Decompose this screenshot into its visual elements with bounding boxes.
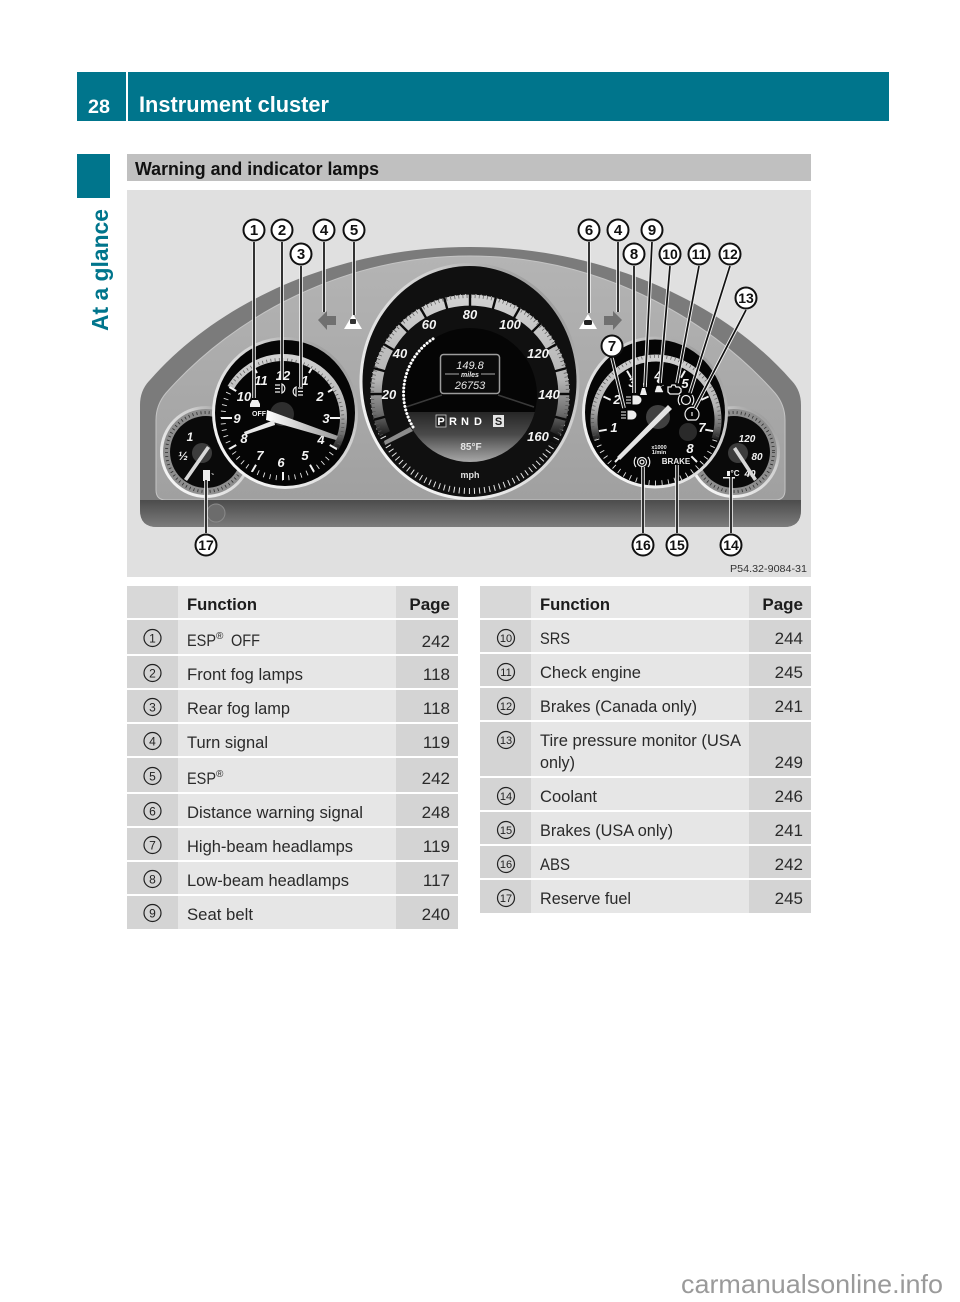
callout lines [206,242,746,533]
callouts: numbered markers [196,220,756,556]
row 9 [127,896,458,929]
row 12: 241 [775,697,803,716]
row 4: 119 [423,733,450,752]
clock numerals: 4 [316,432,325,447]
table header: Page [762,595,803,614]
row 11 [480,654,811,686]
row 6 [127,794,458,826]
row 2 [127,656,458,688]
row 4 [127,724,458,756]
page number tab [77,72,126,121]
tach numerals: 7 [698,420,706,435]
page number tab: 28 [88,97,110,118]
temperature gauge: 40 [743,469,756,480]
row 7: 7 [149,838,156,852]
turn signal right arrow [604,311,622,330]
row 5 [127,758,458,792]
icon: check engine [668,385,681,394]
speed needle [384,427,413,445]
clock numerals: 9 [233,411,241,426]
callouts: numbered markers: 4 [320,222,329,239]
row 1 [127,620,458,654]
dotted fuel-economy arc [404,337,436,427]
row 5: 5 [149,770,156,784]
clock numerals: 6 [277,455,285,470]
icon: airbag [655,379,664,392]
label: BRAKE: BRAKE [662,457,691,466]
chapter title bar: Instrument cluster [139,92,329,117]
gear indicator [436,415,504,428]
section heading: Warning and indicator lamps [135,159,379,179]
row 12: Brakes (Canada only) [540,697,697,716]
icon: coolant [723,471,735,478]
table header: Function [187,595,257,614]
table header: Function [540,595,610,614]
row 8: 8 [149,872,156,886]
tach numerals: 1 [610,420,618,435]
callouts: numbered markers: 9 [648,222,656,239]
row 7 [127,828,458,860]
row 4: Turn signal [187,733,268,752]
tach unit label: 1/min [652,450,667,456]
row 6: 6 [149,804,156,818]
row 8: 117 [423,871,450,890]
row 1: OFF [231,631,260,650]
temperature gauge: 80 [751,452,763,463]
speed numerals: 160 [527,429,550,444]
row 1: 242 [422,632,450,651]
row 17 [480,880,811,913]
row 3: Rear fog lamp [187,699,290,718]
speed numerals: 20 [381,387,397,402]
callouts: numbered markers: 2 [278,222,286,239]
tach unit label [651,445,667,456]
icon: low beam [626,396,641,404]
outside temperature: 85°F [460,442,482,453]
gear indicator: N [461,416,469,428]
icon: high beam [621,411,636,419]
row 16 [480,846,811,878]
tach numerals: 4 [653,368,662,383]
row 8: Low-beam headlamps [187,871,349,890]
clock numerals: 2 [315,389,324,404]
speed numerals: 100 [499,317,522,332]
temperature gauge [688,406,780,498]
central display disc [403,328,537,462]
callouts: numbered markers: 1 [250,222,258,239]
gear indicator: S [495,416,502,428]
callouts: numbered markers: 5 [350,222,358,239]
speedometer [360,263,580,500]
trip display [440,354,500,394]
tach numerals: 3 [628,375,636,390]
temperature gauge: °C [731,469,740,478]
tach numerals: 5 [681,376,689,391]
callouts: numbered markers: 12 [722,246,738,262]
clock numerals: 10 [237,389,252,404]
row 15: 15 [500,825,512,837]
callouts: numbered markers: 16 [635,537,651,553]
row 3 [127,690,458,722]
callouts: numbered markers: 6 [585,222,593,239]
row 17: 17 [500,893,512,905]
row 14: 14 [500,791,512,803]
row 10 [480,620,811,652]
row 1: ESP [187,631,216,650]
tach numerals [610,368,706,456]
row 3: 3 [149,700,156,714]
watermark: carmanualsonline.info [681,1269,943,1299]
row 11: 11 [500,667,512,679]
icon: seat belt [640,382,647,395]
callouts: numbered markers: 14 [723,537,739,553]
row 10: 10 [500,633,512,645]
callouts: numbered markers: 3 [297,246,305,263]
row 5: ® [216,769,224,780]
icon: fuel pump [203,470,214,481]
speed numerals: 140 [538,387,561,402]
table: right function list [480,586,811,913]
icon: ESP triangle [344,314,362,329]
icon: ESP OFF [250,400,267,418]
row 9: 240 [422,905,450,924]
row 14 [480,778,811,810]
temperature gauge: 120 [739,434,756,445]
icon: ESP OFF: OFF [252,411,267,418]
section heading [127,154,811,181]
row 2: Front fog lamps [187,665,303,684]
side tab: At a glance [77,154,113,331]
row 5: 242 [422,769,450,788]
clock numerals: 5 [301,448,309,463]
fuel gauge: ½ [178,449,188,463]
row 6: Distance warning signal [187,803,363,822]
clock numerals: 11 [254,373,268,388]
tach needle [617,405,672,460]
tach numerals: 2 [612,392,621,407]
callouts: numbered markers: 10 [662,246,678,262]
speed numerals: 40 [392,346,408,361]
tachometer [582,336,728,488]
icon: distance warning triangle [579,314,597,329]
row 15: Brakes (USA only) [540,821,673,840]
row 15 [480,812,811,844]
row 12: 12 [500,701,512,713]
unit label: mph [460,470,480,480]
speed scale [370,294,570,491]
clock hands [244,410,338,440]
row 2: 2 [149,666,156,680]
table header [127,586,458,618]
tach numerals: 8 [686,441,694,456]
row 14: Coolant [540,787,597,806]
row 3: 118 [423,699,450,718]
row 1: 1 [149,632,156,646]
row 6: 248 [422,803,450,822]
icon: rear fog lamp [293,387,303,396]
icon: brakes [678,395,694,405]
icon: tire pressure [685,407,699,420]
gear indicator: P [437,416,445,428]
row 13 [480,722,811,776]
row 16: 242 [775,855,803,874]
panel: instrument cluster diagram [127,190,811,577]
table header [480,586,811,618]
fuel gauge: 1 [187,430,194,444]
row 13: 13 [500,735,512,747]
icon: front fog lamp [275,384,285,393]
row 9: Seat belt [187,905,253,924]
table: left function list [127,586,458,929]
callouts: numbered markers: 13 [738,290,754,306]
row 7: High-beam headlamps [187,837,353,856]
speed numerals [381,307,561,444]
speed numerals: 80 [463,307,478,322]
row 5: ESP [187,769,216,788]
row 13: Tire pressure monitor (USA [540,731,742,750]
table header: Page [409,595,450,614]
row 16: ABS [540,855,570,874]
fuel gauge [160,406,252,498]
clock numerals [233,368,330,470]
trip display: miles [461,372,479,379]
clock numerals: 12 [276,368,291,383]
row 17: 245 [775,889,803,908]
gear indicator: R [449,416,457,428]
clock numerals: 7 [256,448,264,463]
row 14: 246 [775,787,803,806]
callouts: numbered markers: 11 [692,246,707,262]
callouts: numbered markers: 4 [614,222,623,239]
tach scale [592,356,720,483]
row 16: 16 [500,859,512,871]
cluster housing [140,247,801,527]
row 10: SRS [540,629,570,648]
side tab: At a glance: At a glance [87,209,113,331]
row 4: 4 [149,734,156,748]
speed numerals: 120 [527,346,550,361]
row 11: 245 [775,663,803,682]
row 9: 9 [149,906,156,920]
row 12 [480,688,811,720]
chapter title bar [128,72,889,121]
row 17: Reserve fuel [540,889,631,908]
tach unit label: x1000 [651,445,667,451]
row 1: ® [216,631,224,642]
callouts: numbered markers: 7 [608,338,616,355]
clock numerals: 1 [301,373,309,388]
row 7: 119 [423,837,450,856]
trip display: 26753 [454,380,486,392]
clock numerals: 8 [240,431,248,446]
turn signal left arrow [318,311,336,330]
row 13: only) [540,753,575,772]
callouts: numbered markers: 15 [669,537,685,553]
figure reference: P54.32-9084-31 [730,563,807,575]
callouts: numbered markers: 8 [630,246,638,263]
row 2: 118 [423,665,450,684]
row 8 [127,862,458,894]
icon: ABS [634,457,650,467]
row 11: Check engine [540,663,641,682]
row 15: 241 [775,821,803,840]
clock scale [221,357,344,480]
speed numerals: 60 [422,317,437,332]
trip display: 149.8 [456,360,485,372]
row 13: 249 [775,753,803,772]
clock numerals: 3 [322,411,330,426]
callouts: numbered markers: 17 [198,537,214,553]
clock [212,337,358,489]
gear indicator: D [474,416,482,428]
row 10: 244 [775,629,803,648]
